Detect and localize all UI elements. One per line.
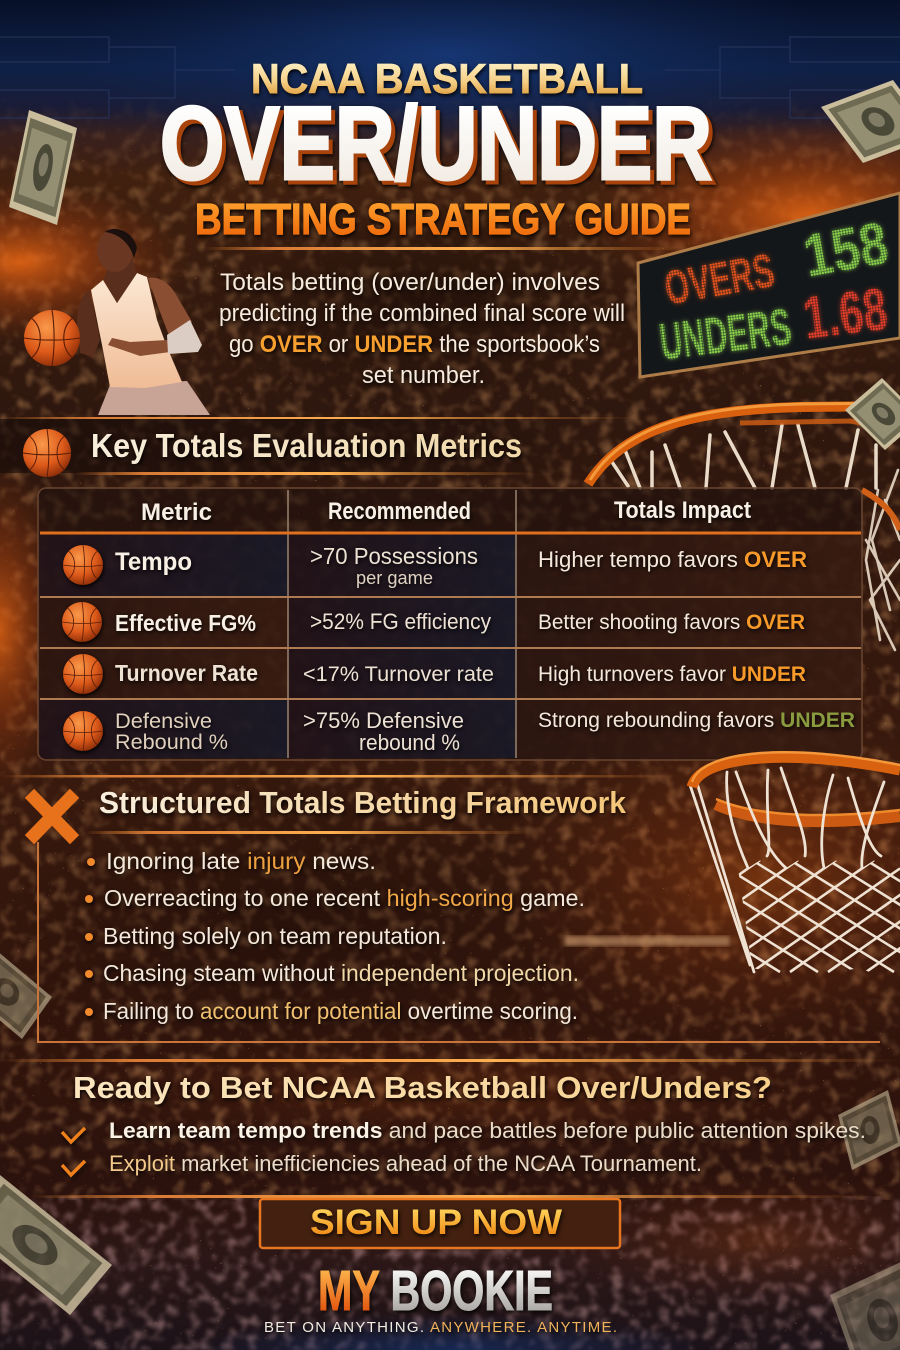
key metrics header [0,417,640,477]
header band [0,419,600,473]
sign up button: SIGN UP NOW [310,1203,562,1242]
title line: Over/Under: OVER/UNDER [160,86,712,202]
neck and head [104,258,137,303]
title [160,55,716,244]
intro paragraph: Totals betting (over/under) involves [220,269,600,296]
back arm [77,290,100,357]
row: Effective FG%: Better shooting favors OVER [538,611,805,634]
shorts [98,381,210,415]
row: Effective FG%: Effective FG% [115,610,256,636]
icon: X mark [34,798,70,835]
row: Defensive Rebound %: Strong rebounding favors UNDER [538,709,855,732]
bullet 1: Ignoring late injury news. [106,848,376,874]
framework mistakes list [85,848,585,1024]
intro paragraph: go OVER or UNDER the sportsbook’s [229,331,600,358]
intro paragraph: predicting if the combined final score will [219,300,625,327]
tagline: BET ON ANYTHING. ANYWHERE. ANYTIME. [264,1319,617,1336]
UNDERS reading: UNDERS [656,298,794,372]
table header row: Recommended [328,498,471,525]
row: Tempo [63,543,807,588]
upper basketball hoop [588,403,900,650]
bullet 3: Betting solely on team reputation. [103,923,447,949]
heading: Structured Totals Betting Framework [99,785,627,820]
row: Tempo: per game [356,568,433,588]
check item 2: Exploit market inefficiencies ahead of the NCAA Tournament. [109,1151,702,1176]
MyBookie logo [264,1259,617,1336]
intro paragraph: set number. [362,362,485,389]
framework header [0,775,680,835]
title line: Betting Strategy Guide: BETTING STRATEGY GUIDE [195,195,691,244]
table header row [141,497,751,526]
row: Turnover Rate: Turnover Rate [115,660,258,686]
call to action section [0,1059,900,1198]
scoreboard [638,193,900,377]
row: Defensive Rebound %: Rebound % [115,731,228,754]
framework panel frame [38,842,880,1042]
intro paragraph [219,269,625,389]
wordmark: MY BOOKIE [318,1259,553,1323]
row: Turnover Rate: <17% Turnover rate [303,663,494,686]
row: Effective FG% [62,602,805,642]
OVERS reading: OVERS [661,245,778,316]
sign up button [260,1199,620,1248]
metrics table [38,488,862,760]
row: Tempo: Higher tempo favors OVER [538,547,807,572]
row: Turnover Rate [63,654,806,694]
section top line [0,775,680,778]
ball [24,310,80,366]
table header row: Totals Impact [614,497,751,524]
bullet 2: Overreacting to one recent high-scoring game. [104,885,585,911]
bullet 5: Failing to account for potential overtime scoring. [103,998,578,1024]
row: Effective FG%: >52% FG efficiency [310,609,491,634]
row: Tempo: >70 Possessions [310,543,478,569]
CTA heading: Ready to Bet NCAA Basketball Over/Unders? [73,1070,772,1105]
front arm with sleeve [108,278,192,356]
jersey [91,273,182,388]
basketball player dribbling [24,228,210,415]
check item 1: Learn team tempo trends and pace battles before public attention spikes. [109,1118,866,1143]
row: Turnover Rate: High turnovers favor UNDER [538,663,806,686]
row: Defensive Rebound % [63,708,855,755]
icon: basketball [23,429,71,477]
row: Defensive Rebound %: rebound % [359,730,460,755]
heading: Key Totals Evaluation Metrics [91,427,522,464]
bullet 4: Chasing steam without independent projection. [103,960,579,986]
title line: Over/Under: OVER/UNDER [164,90,716,206]
row: Tempo: Tempo [115,548,192,576]
row: Defensive Rebound %: Defensive [115,710,212,733]
tournament bracket lines [0,37,900,118]
lower basketball hoop with net [686,751,900,974]
table header row: Metric [141,499,212,526]
title line: NCAA Basketball: NCAA BASKETBALL [251,55,643,102]
row: Defensive Rebound %: >75% Defensive [303,708,464,733]
